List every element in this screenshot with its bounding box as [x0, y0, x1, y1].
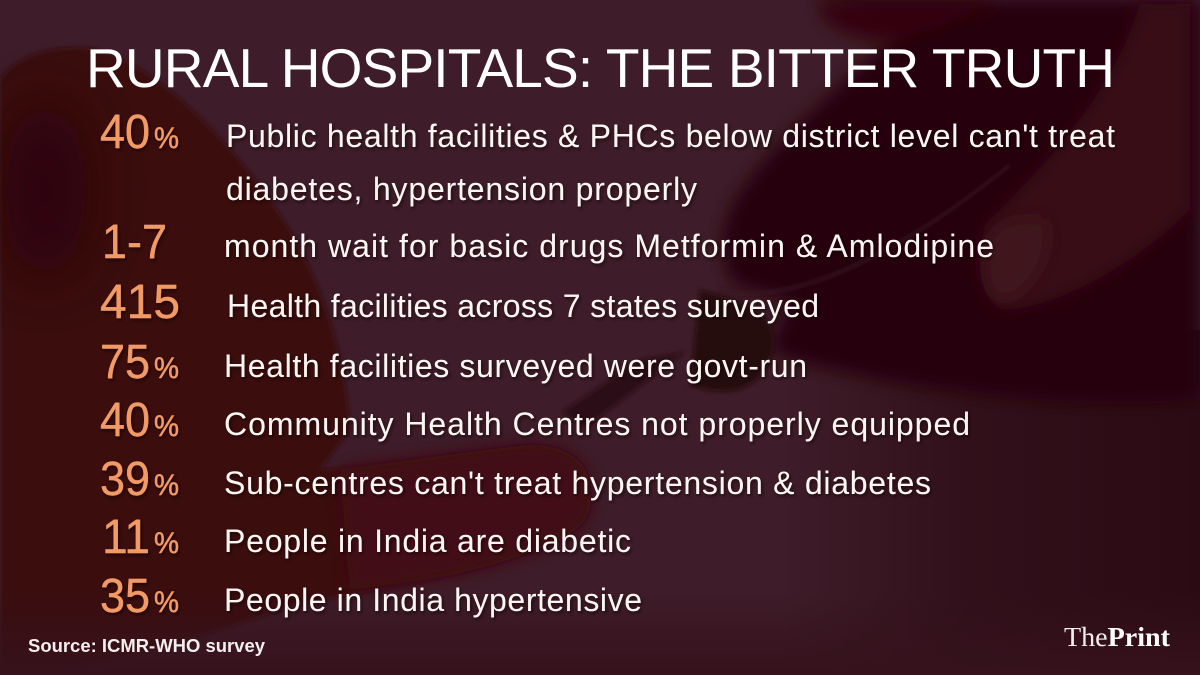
row: 39% sub-centres: 39 — [100, 453, 150, 506]
row: 40% public health facilities — [100, 106, 1115, 207]
row: 415 facilities — [100, 276, 819, 329]
row: 40% community health centres: Community Health Centres not properly equipped — [224, 406, 970, 442]
row: 11% diabetic — [102, 511, 631, 564]
row: 35% hypertensive: % — [154, 586, 179, 619]
row: 40% public health facilities: 40 — [100, 106, 150, 159]
row: 39% sub-centres — [100, 453, 931, 506]
row: 40% public health facilities: Public health facilities & PHCs below district level can't treat — [226, 118, 1115, 154]
row: 40% community health centres — [100, 394, 970, 447]
dark right area — [780, 330, 1200, 675]
bottom fade — [0, 590, 1200, 675]
row: 75% govt-run: 75 — [100, 336, 150, 389]
row: 415 facilities: Health facilities across 7 states surveyed — [227, 288, 819, 324]
row: 75% govt-run: % — [154, 352, 179, 385]
row: 1-7 month wait: month wait for basic drugs Metformin & Amlodipine — [224, 228, 994, 264]
source: Source: ICMR-WHO survey — [28, 636, 265, 656]
dark stethoscope disc and top right — [723, 0, 1200, 404]
title: RURAL HOSPITALS: THE BITTER TRUTH — [86, 37, 1115, 99]
row: 39% sub-centres: % — [154, 469, 179, 502]
row: 35% hypertensive: 35 — [100, 570, 150, 623]
row: 1-7 month wait — [102, 216, 994, 269]
row: 415 facilities: 415 — [100, 276, 180, 329]
row: 75% govt-run: Health facilities surveyed were govt-run — [224, 348, 807, 384]
right finger — [980, 4, 1190, 310]
row: 40% public health facilities: % — [154, 122, 179, 155]
row: 75% govt-run — [100, 336, 807, 389]
row: 39% sub-centres: Sub-centres can't treat hypertension & diabetes — [224, 465, 931, 501]
stethoscope strip — [562, 352, 685, 428]
row: 40% community health centres: 40 — [100, 394, 150, 447]
mauve ring highlight — [720, 165, 1010, 293]
logo: ThePrint: ThePrint — [1064, 622, 1170, 652]
row: 11% diabetic: People in India are diabetic — [224, 523, 631, 559]
row: 35% hypertensive — [100, 570, 642, 623]
row: 40% community health centres: % — [154, 410, 179, 443]
left hand — [0, 47, 590, 675]
row: 11% diabetic: % — [154, 527, 179, 560]
row: 1-7 month wait: 1-7 — [102, 216, 167, 269]
row: 40% public health facilities: diabetes, hypertension properly — [226, 171, 697, 207]
row: 11% diabetic: 11 — [102, 511, 150, 564]
row: 35% hypertensive: People in India hypertensive — [224, 582, 642, 618]
